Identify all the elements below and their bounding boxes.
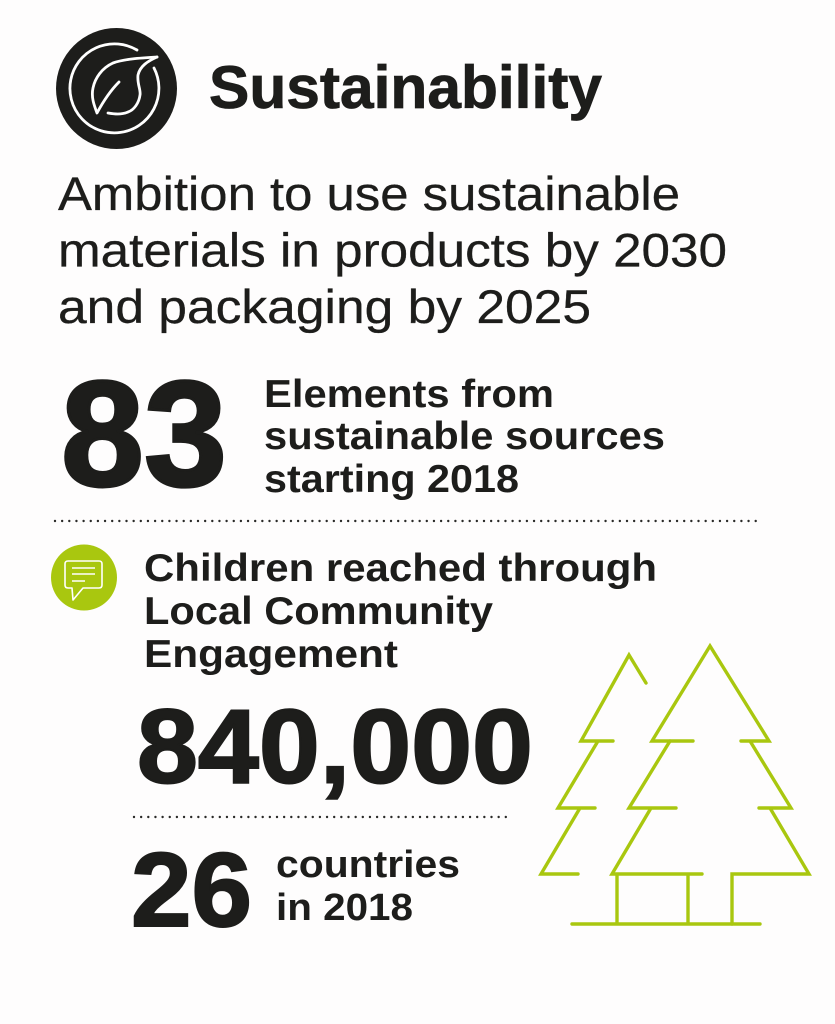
- heading: children reached: Engagement: [144, 633, 398, 676]
- heading: children reached: Children reached through: [144, 547, 657, 590]
- stat: 83: 83: [61, 350, 227, 518]
- ambition text: Ambition to use sustainable: [58, 167, 680, 220]
- title: Sustainability: [209, 54, 603, 121]
- stat label: elements from sustainable sources: [264, 373, 665, 501]
- stat label: elements from sustainable sources: starting 2018: [264, 458, 519, 501]
- stat label: elements from sustainable sources: sustainable sources: [264, 415, 665, 458]
- ambition text: and packaging by 2025: [58, 280, 591, 333]
- icon: two trees: [541, 646, 809, 924]
- stat: 26: 26: [131, 832, 252, 949]
- heading: children reached: [144, 547, 657, 676]
- stat label: countries in 2018: [276, 844, 460, 929]
- stat label: countries in 2018: countries: [276, 844, 460, 886]
- icon: leaf in black circle: [56, 28, 177, 149]
- ambition text: [58, 167, 727, 333]
- heading: children reached: Local Community: [144, 590, 493, 633]
- icon: speech bubble: [51, 544, 117, 610]
- stat label: countries in 2018: in 2018: [276, 887, 413, 929]
- stat label: elements from sustainable sources: Elements from: [264, 373, 554, 416]
- ambition text: materials in products by 2030: [58, 224, 727, 276]
- stat: 840,000: 840,000: [137, 688, 533, 806]
